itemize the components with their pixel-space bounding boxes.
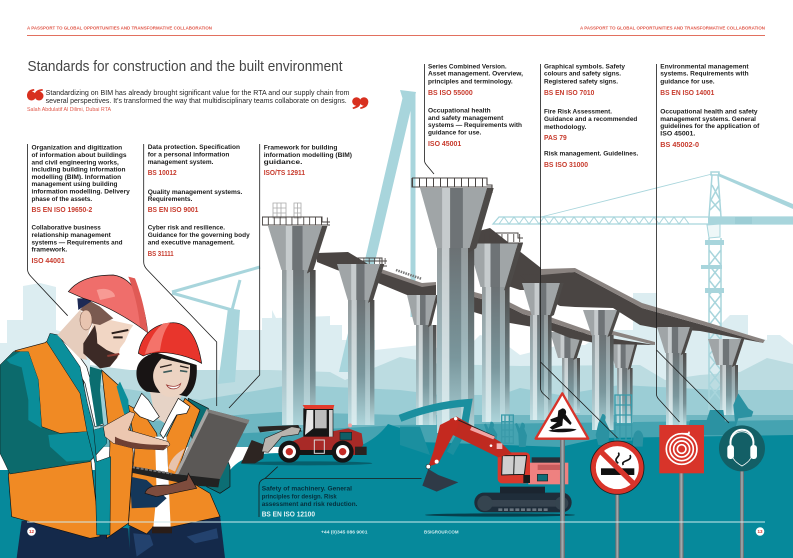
man with hard hat (0, 275, 170, 558)
far piers (550, 332, 638, 423)
text column 1: Organization and digitization (32, 145, 122, 152)
excavator (422, 417, 575, 517)
text: safety of machinery (262, 486, 358, 519)
background silhouettes (400, 393, 753, 455)
text column 3: guidance. (264, 159, 303, 166)
wheel loader (241, 405, 372, 465)
sign: ear protection (719, 425, 765, 558)
text column 4: systems — Requirements with (428, 122, 522, 129)
text column 2: Requirements. (148, 196, 193, 203)
text column 1: phase of the assets. (32, 196, 92, 203)
quote attribution: Salah Abdulatif Al Dilimi, Dubai RTA (27, 107, 112, 113)
footer website: BSIGROUP.COM (424, 530, 459, 534)
background tower crane (172, 90, 793, 410)
quote (27, 89, 368, 113)
text column 3: Framework for building (264, 145, 337, 152)
text column 1 (32, 145, 130, 265)
text column 2: BS 10012 (148, 170, 177, 177)
bridge (262, 178, 765, 433)
text column 1: Collaborative business (32, 225, 101, 232)
quote text: Standardizing on BIM has already brought significant value for the RTA and our supply chain from (46, 90, 350, 97)
left deck (317, 228, 541, 295)
text column 6: management systems. General (660, 116, 756, 123)
text column 4: BS ISO 55000 (428, 90, 473, 97)
page number left: 12 (29, 529, 34, 534)
icon: closing quote mark (352, 97, 368, 109)
text column 1: ISO 44001 (32, 258, 65, 265)
text column 5 (544, 64, 638, 169)
text column 6: BS 45002-0 (660, 142, 699, 149)
icon: opening quote mark (27, 89, 44, 100)
text column 1: of information about buildings (32, 152, 127, 159)
pier 6 (522, 283, 564, 420)
pier 2 (337, 258, 387, 425)
tower crane jib and mast (493, 172, 793, 410)
text: safety of machinery: assessment and risk reduction. (262, 501, 358, 508)
workers (0, 275, 249, 558)
text column 5: PAS 79 (544, 135, 567, 142)
text column 4: Asset management. Overview, (428, 71, 523, 78)
text column 1: including building information (32, 167, 126, 174)
text column 3 (264, 145, 352, 177)
text column 2: management system. (148, 159, 214, 166)
background left crane (172, 267, 260, 384)
background skyline (0, 283, 793, 447)
main teal ground (0, 424, 793, 558)
text column 2: and executive management. (148, 240, 235, 247)
text column 5: Fire Risk Assessment. (544, 109, 612, 116)
text column 5: BS EN ISO 7010 (544, 90, 594, 97)
pier 8 (583, 310, 620, 430)
text column 1: framework. (32, 247, 67, 254)
lower deck (467, 290, 655, 345)
text column 6 (660, 64, 760, 149)
text column 2: Data protection. Specification (148, 144, 240, 151)
text column 2: Guidance for the governing body (148, 232, 250, 239)
text column 6: systems. Requirements with (660, 71, 749, 78)
background workers and scaffolding (484, 393, 753, 448)
footer rule (27, 522, 765, 523)
text column 3: ISO/TS 12911 (264, 170, 305, 177)
text column 6: ISO 45001. (660, 131, 695, 138)
header right: A PASSPORT TO GLOBAL OPPORTUNITIES AND TRANSFORMATIVE COLLABORATION (580, 26, 765, 32)
quote text: several perspectives. It's transformed the way that multidisciplinary teams collaborate on designs. (46, 98, 347, 105)
text column 5: Guidance and a recommended (544, 116, 637, 123)
text column 5: colours and safety signs. (544, 71, 621, 78)
sign: fire hose (659, 425, 704, 558)
text column 2: BS 31111 (148, 251, 174, 258)
pier 11 (708, 339, 744, 415)
text column 5: Registered safety signs. (544, 79, 618, 86)
text column 2: BS EN ISO 9001 (148, 207, 198, 214)
header left: A PASSPORT TO GLOBAL OPPORTUNITIES AND TRANSFORMATIVE COLLABORATION (27, 26, 212, 32)
sign: no smoking (591, 441, 644, 558)
text column 4: guidance for use. (428, 130, 481, 137)
page number right (756, 527, 764, 536)
text column 6: guidelines for the application of (660, 123, 760, 130)
text column 6: BS EN ISO 14001 (660, 90, 714, 97)
pier 10 (657, 327, 693, 425)
pier 4 (412, 178, 494, 433)
text column 5: Graphical symbols. Safety (544, 64, 625, 71)
page number right: 13 (757, 529, 763, 534)
text column 1: and civil engineering works, (32, 159, 119, 166)
leader lines (28, 64, 729, 517)
quote text (46, 90, 350, 105)
sign: slip hazard (536, 393, 588, 558)
text column 3: information modelling (BIM) (264, 152, 352, 159)
pier 3 (407, 295, 439, 425)
text column 6: Environmental management (660, 64, 749, 71)
text column 5: methodology. (544, 124, 586, 131)
footer phone: +44 (0)345 086 9001 (321, 530, 368, 534)
text: safety of machinery: BS EN ISO 12100 (262, 512, 315, 519)
text column 4 (428, 64, 523, 148)
text column 4: Occupational health (428, 108, 491, 115)
text column 2: Quality management systems. (148, 189, 243, 196)
background excavator (400, 403, 468, 455)
text column 1: information modelling. Delivery (32, 189, 130, 196)
pier 5 (468, 233, 523, 422)
text column 5: Risk management. Guidelines. (544, 151, 638, 158)
text column 2 (148, 144, 250, 258)
text column 1: modelling (BIM). Information (32, 174, 121, 181)
title: Standards for construction and the built environment (28, 58, 343, 75)
woman with laptop (108, 323, 249, 558)
text column 2: Cyber risk and resilience. (148, 225, 225, 232)
text column 6: guidance for use. (660, 79, 715, 86)
text column 4: and safety management (428, 115, 504, 122)
text column 2: for a personal information (148, 152, 229, 159)
text: safety of machinery: principles for design. Risk (262, 493, 337, 500)
text column 6: Occupational health and safety (660, 109, 758, 116)
text column 1: systems — Requirements and (32, 240, 122, 247)
text column 5: BS ISO 31000 (544, 162, 588, 169)
text column 1: relationship management (32, 232, 112, 239)
page number left (27, 527, 36, 536)
text: safety of machinery: Safety of machinery. General (262, 486, 352, 493)
text column 4: principles and terminology. (428, 79, 513, 86)
text column 1: BS EN ISO 19650-2 (32, 207, 92, 214)
text column 4: ISO 45001 (428, 141, 461, 148)
main deck (520, 268, 765, 343)
pier 1 with scaffolding (262, 203, 330, 425)
text column 1: management using building (32, 181, 118, 188)
text column 4: Series Combined Version. (428, 64, 507, 71)
